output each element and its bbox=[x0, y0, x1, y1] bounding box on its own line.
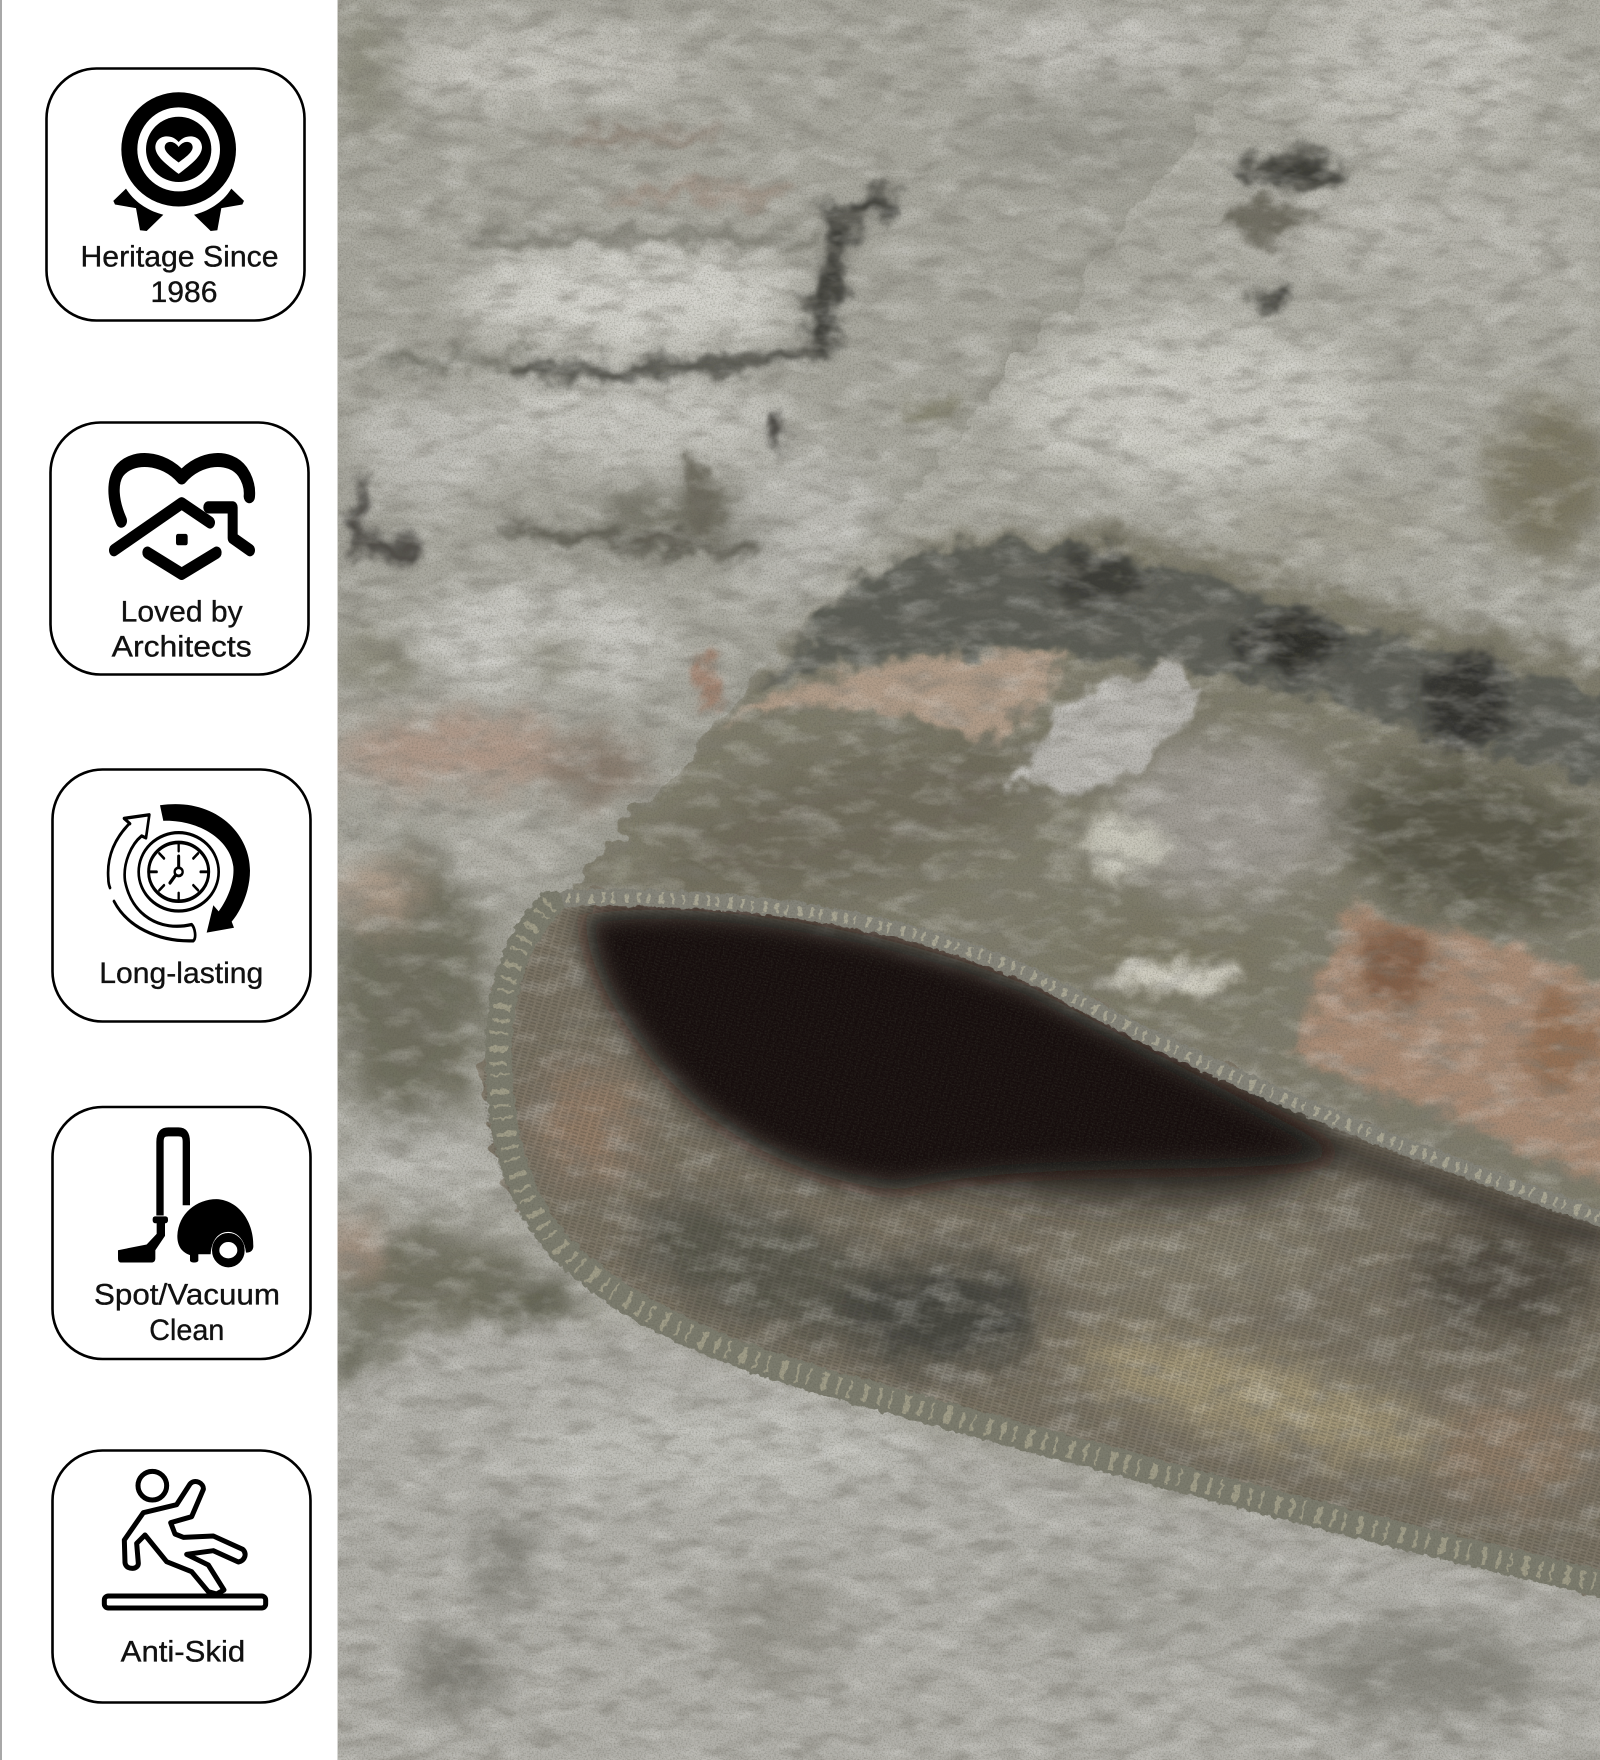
rug mottling bbox=[338, 0, 1600, 1760]
label: Spot/Vacuum Clean bbox=[94, 1278, 280, 1347]
icon: heart with house bbox=[114, 460, 250, 574]
icon: vacuum cleaner bbox=[118, 1132, 253, 1263]
label: Long-lasting: Long-lasting bbox=[99, 957, 263, 990]
badge: Spot/Vacuum Clean bbox=[52, 1107, 310, 1359]
badge: Anti-Skid bbox=[52, 1450, 310, 1702]
rug underside bbox=[472, 887, 1600, 1628]
label: Loved by Architects: Loved by bbox=[121, 596, 243, 629]
icon: award rosette with heart bbox=[113, 92, 244, 231]
label: Heritage Since 1986 bbox=[80, 240, 278, 309]
icon: clock with circular arrows bbox=[108, 804, 250, 941]
label: Heritage Since 1986: Heritage Since bbox=[80, 240, 278, 274]
label: Loved by Architects bbox=[112, 596, 252, 664]
label: Anti-Skid: Anti-Skid bbox=[121, 1636, 245, 1669]
badge: Loved by Architects bbox=[50, 422, 308, 674]
icon: person slipping on floor bbox=[104, 1471, 266, 1608]
badge: Heritage Since 1986 bbox=[46, 68, 304, 320]
label: Spot/Vacuum Clean: Spot/Vacuum bbox=[94, 1278, 280, 1312]
lower floor surface bbox=[314, 1325, 1600, 1760]
shaded lower portion of roll bbox=[539, 528, 1600, 1258]
rug pile texture bbox=[338, 0, 1600, 1760]
dark flecks on roll bbox=[1224, 155, 1347, 303]
soft shaded roll contour bbox=[572, 94, 1226, 880]
peach band on roll bbox=[730, 652, 1067, 741]
label: Loved by Architects: Architects bbox=[112, 630, 252, 664]
white sidebar bbox=[0, 0, 338, 1760]
label: Spot/Vacuum Clean: Clean bbox=[149, 1314, 224, 1347]
dark lines on floor bbox=[359, 132, 954, 702]
dark band on roll bbox=[764, 543, 1600, 797]
dark hollow of the roll bbox=[472, 887, 1600, 1606]
label: Heritage Since 1986: 1986 bbox=[150, 276, 218, 309]
badge: Long-lasting bbox=[52, 770, 310, 1022]
rolled rug top surface bbox=[494, 0, 1600, 1258]
rug binding edges bbox=[499, 898, 1600, 1594]
